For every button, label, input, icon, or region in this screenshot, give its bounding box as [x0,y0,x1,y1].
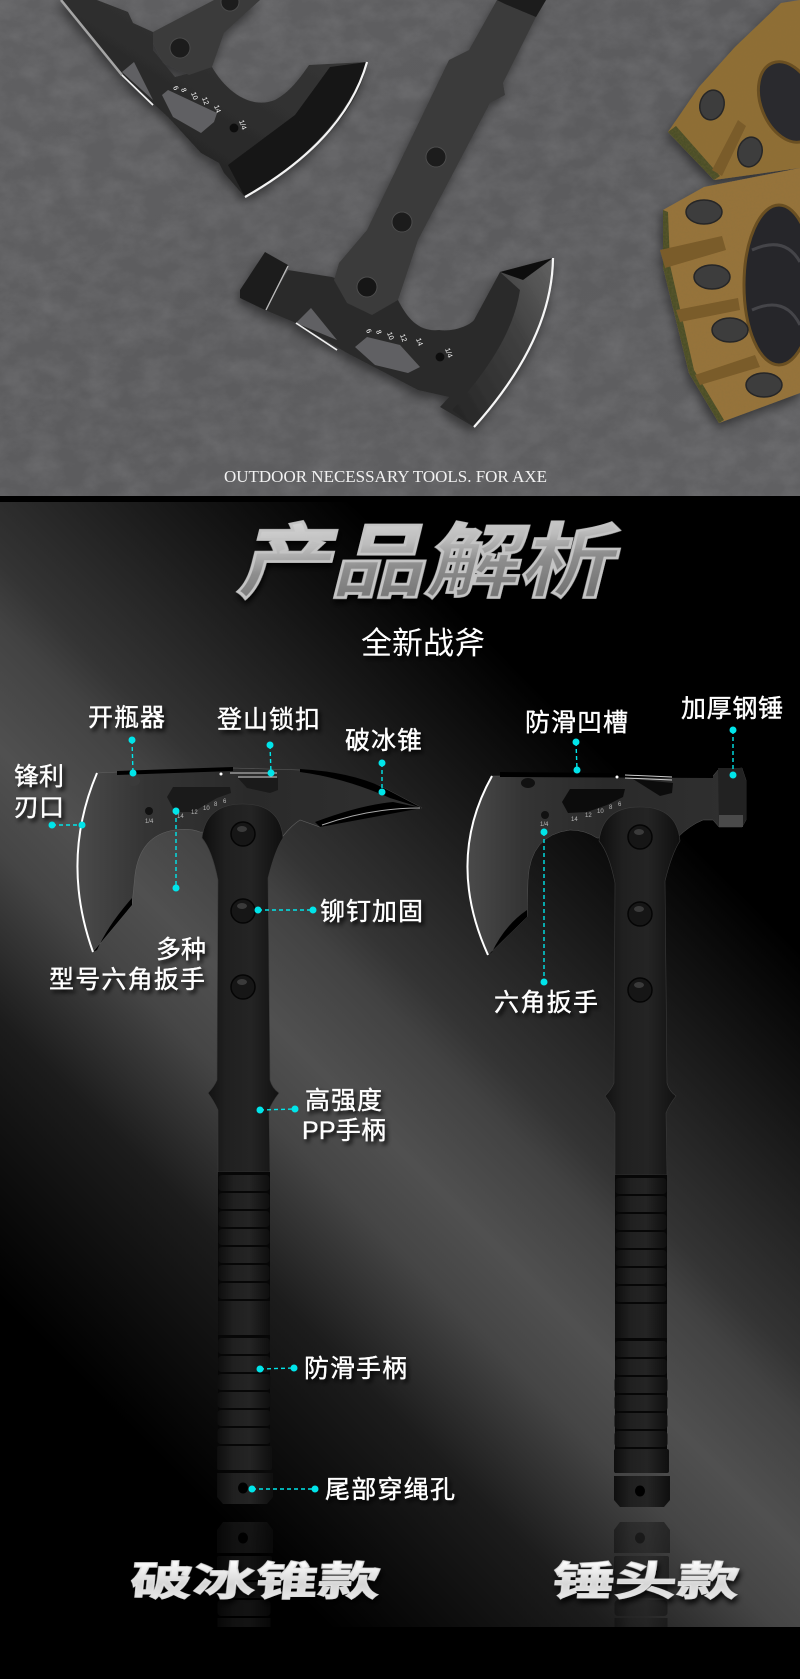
model name: hammer: 锤头款 [550,1560,742,1604]
photo: lower axe: 14 [414,337,423,347]
reflections of handles [217,1522,670,1627]
callout dots [48,726,736,1492]
photo: tactical gloves [660,0,800,423]
label: ice pick: 破冰锥 [345,727,422,755]
photo: lower axe: 8 [374,329,382,335]
photo: lower axe: 1/4 [443,347,453,359]
label: hex wrench: 六角扳手 [494,989,598,1017]
model name: ice pick: 破冰锥款 [128,1560,383,1604]
photo caption: OUTDOOR NECESSARY TOOLS. FOR AXE [224,467,547,486]
subtitle: 全新战斧 [361,626,485,661]
handle: hammer model [599,807,680,1507]
photo: upper axe [61,0,367,197]
axe head: ice pick: 14 [177,814,184,820]
axe head: hammer: 6 [618,802,622,808]
label: hex wrench sizes: 型号六角扳手 [49,966,205,994]
axe head: hammer: 1/4 [540,822,549,828]
panel: product analysis background [0,496,800,1679]
axe head: hammer: 14 [571,817,578,823]
photo: upper axe: 6 [171,85,179,91]
axe head: ice pick: 10 [203,806,210,812]
label: PP handle: PP手柄 [302,1117,386,1145]
label: bottle opener: 开瓶器 [88,704,165,732]
photo: lower axe [240,0,553,427]
callout lines [52,730,733,1489]
photo: lower axe: 10 [385,331,394,341]
label: high strength: 高强度 [305,1087,382,1115]
title: 产品解析 [232,518,630,608]
photo: lower axe: 6 [364,328,372,334]
axe head: ice pick: 6 [223,799,227,805]
photo: upper axe: 8 [179,87,187,93]
axe head: ice pick: 8 [214,802,218,808]
axe: ice pick model [77,767,422,1504]
label: sharp edge: 锋利 [14,763,64,791]
photo: upper axe: 14 [212,104,221,114]
label: lanyard hole: 尾部穿绳孔 [325,1476,455,1504]
label: climbing buckle: 登山锁扣 [217,706,320,734]
panel: photo of axes and gloves [0,0,800,496]
label: edge line two: 刃口 [14,794,64,822]
label: rivet: 铆钉加固 [320,898,423,926]
axe head: hammer: 12 [585,813,592,819]
axe head: ice pick: 1/4 [145,819,154,825]
axe head: hammer [467,768,746,955]
photo: lower axe: 12 [398,333,407,343]
axe head: hammer: 8 [609,805,613,811]
axe head: hammer: 10 [597,809,604,815]
handle: ice pick model [202,804,283,1504]
label: anti-slip handle: 防滑手柄 [304,1355,407,1383]
label: thick hammer: 加厚钢锤 [681,695,783,723]
photo: upper axe: 1/4 [237,119,247,131]
photo: upper axe: 12 [200,96,209,106]
photo: upper axe: 10 [189,91,198,101]
feature labels [14,695,783,1504]
axe head: ice pick [77,767,422,952]
axe: hammer model [467,768,746,1507]
label: anti-slip groove: 防滑凹槽 [525,709,628,737]
axe head: ice pick: 12 [191,810,198,816]
label: multiple: 多种 [156,936,206,964]
